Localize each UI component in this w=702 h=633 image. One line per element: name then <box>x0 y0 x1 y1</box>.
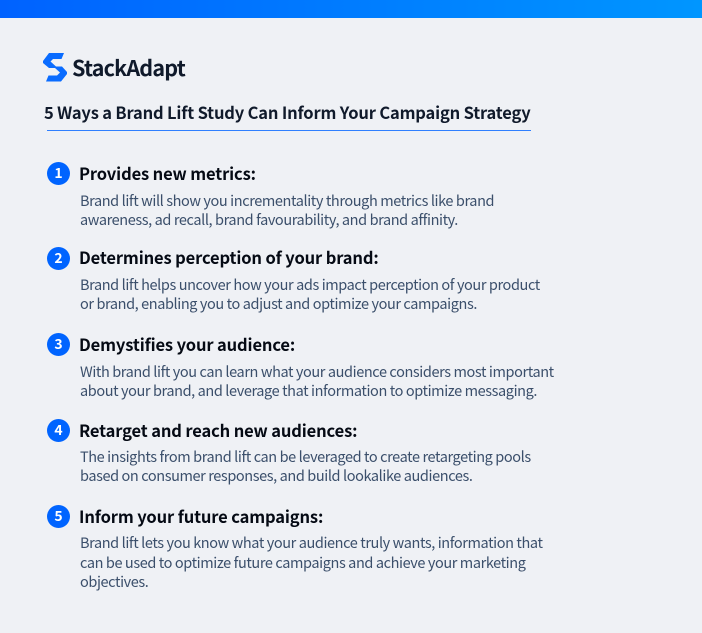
item 2 <box>47 245 540 314</box>
number badge 1 <box>47 162 70 185</box>
item 5 <box>47 504 543 592</box>
body text 5: objectives. <box>80 571 148 592</box>
logo wordmark: StackAdapt <box>72 52 185 83</box>
body text 4: The insights from brand lift can be leveraged to create retargeting pools <box>80 446 531 467</box>
title underline <box>47 130 531 131</box>
heading 3: Demystifies your audience: <box>79 332 295 356</box>
title: 5 Ways a Brand Lift Study Can Inform Your Campaign Strategy <box>44 100 531 124</box>
body text 3: With brand lift you can learn what your audience considers most important <box>80 361 554 382</box>
heading 1: Provides new metrics: <box>79 161 256 185</box>
item 4 <box>47 418 531 486</box>
logo: StackAdapt <box>43 52 186 83</box>
top gradient bar <box>0 0 702 18</box>
body text 3: about your brand, and leverage that information to optimize messaging. <box>80 380 537 401</box>
icon: StackAdapt mark <box>43 53 67 82</box>
number badge 2 <box>47 247 70 270</box>
heading 4: Retarget and reach new audiences: <box>79 418 357 442</box>
body text 1: awareness, ad recall, brand favourability, and brand affinity. <box>80 209 458 230</box>
heading 5: Inform your future campaigns: <box>79 504 323 528</box>
body text 5: can be used to optimize future campaigns and achieve your marketing <box>80 552 526 572</box>
body text 2: Brand lift helps uncover how your ads impact perception of your product <box>80 274 540 295</box>
number badge 2: 2 <box>54 248 63 268</box>
body text 2 <box>80 274 540 314</box>
body text 1 <box>80 190 494 230</box>
item 3 <box>47 332 554 401</box>
item 1 <box>47 161 494 230</box>
body text 4 <box>80 446 531 486</box>
number badge 4 <box>47 419 70 442</box>
body text 5 <box>80 532 543 592</box>
number badge 3 <box>47 333 70 356</box>
heading 2: Determines perception of your brand: <box>79 245 379 269</box>
body text 2: or brand, enabling you to adjust and optimize your campaigns. <box>80 293 477 314</box>
number badge 3: 3 <box>54 334 63 354</box>
body text 4: based on consumer responses, and build lookalike audiences. <box>80 465 472 486</box>
number badge 4: 4 <box>54 420 63 440</box>
body text 3 <box>80 361 554 401</box>
body text 5: Brand lift lets you know what your audience truly wants, information that <box>80 532 543 553</box>
number badge 5 <box>47 505 70 528</box>
body text 1: Brand lift will show you incrementality through metrics like brand <box>80 190 494 211</box>
number badge 5: 5 <box>54 506 63 526</box>
number badge 1: 1 <box>54 163 63 183</box>
